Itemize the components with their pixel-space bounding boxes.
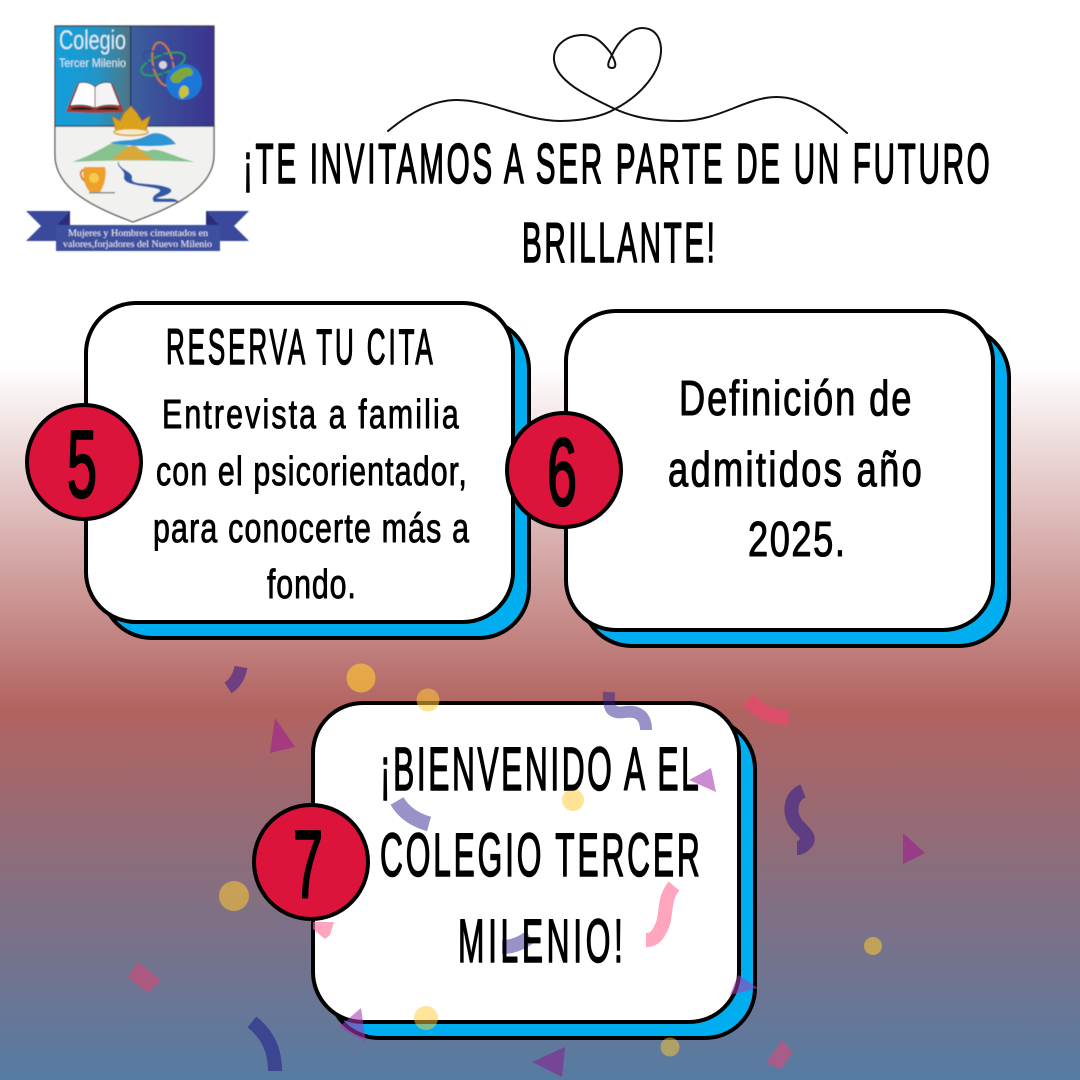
icon: clay jug — [81, 167, 115, 194]
title — [243, 132, 990, 275]
card 5 face — [86, 303, 513, 622]
school crest logo — [26, 25, 249, 251]
card 7 text: COLEGIO TERCER — [380, 822, 700, 890]
crest name — [59, 25, 126, 70]
card 6 text: admitidos año — [668, 443, 922, 497]
card 6 blue shadow — [582, 327, 1009, 646]
badge: number 6 — [507, 413, 621, 527]
crest motto banner: valores,forjadores del Nuevo Milenio — [63, 239, 212, 250]
card 7 text — [380, 736, 700, 976]
card 5 text: Entrevista a familia — [162, 390, 460, 437]
card 7 face — [313, 703, 739, 1022]
crest motto banner: Mujeres y Hombres cimentados en — [68, 229, 208, 239]
card 5 text: para conocerte más a — [153, 504, 470, 551]
card 5 text: fondo. — [267, 560, 356, 607]
icon: open book — [66, 82, 124, 113]
badge: number 5 — [27, 405, 141, 519]
card 6 text — [668, 372, 922, 567]
badge: number 7 — [254, 805, 368, 919]
card 6 text: Definición de — [679, 372, 911, 426]
card 7 text: ¡BIENVENIDO A EL — [380, 736, 699, 804]
card 6 face — [566, 311, 993, 630]
card 5 text: con el psicorientador, — [156, 447, 467, 494]
icon: landscape with river — [72, 133, 195, 202]
crest name: Tercer Milenio — [59, 56, 126, 70]
card 5 blue shadow — [102, 319, 529, 638]
panel: step 6 card — [566, 311, 1009, 646]
icon: crown — [112, 106, 150, 136]
icon: atom and globe — [138, 40, 202, 100]
card 5 text — [153, 320, 470, 607]
badge: number 6: 6 — [547, 419, 577, 526]
crest ribbon — [26, 211, 249, 241]
badge: number 5: 5 — [67, 411, 97, 518]
card 6 text: 2025. — [748, 513, 845, 567]
title: BRILLANTE! — [522, 211, 715, 275]
crest shield — [55, 26, 214, 226]
panel: step 7 card — [313, 703, 755, 1038]
title: ¡TE INVITAMOS A SER PARTE DE UN FUTURO — [243, 132, 990, 196]
icon: heart flourish line — [388, 28, 847, 133]
crest shield outline — [55, 26, 214, 222]
card 5 text: RESERVA TU CITA — [166, 320, 433, 375]
card 7 blue shadow — [329, 719, 755, 1038]
panel: step 5 card — [86, 303, 529, 638]
confetti — [128, 664, 925, 1077]
badge: number 7: 7 — [293, 811, 323, 918]
crest motto banner — [56, 225, 220, 251]
crest name: Colegio — [59, 25, 126, 55]
card 7 text: MILENIO! — [458, 908, 623, 976]
